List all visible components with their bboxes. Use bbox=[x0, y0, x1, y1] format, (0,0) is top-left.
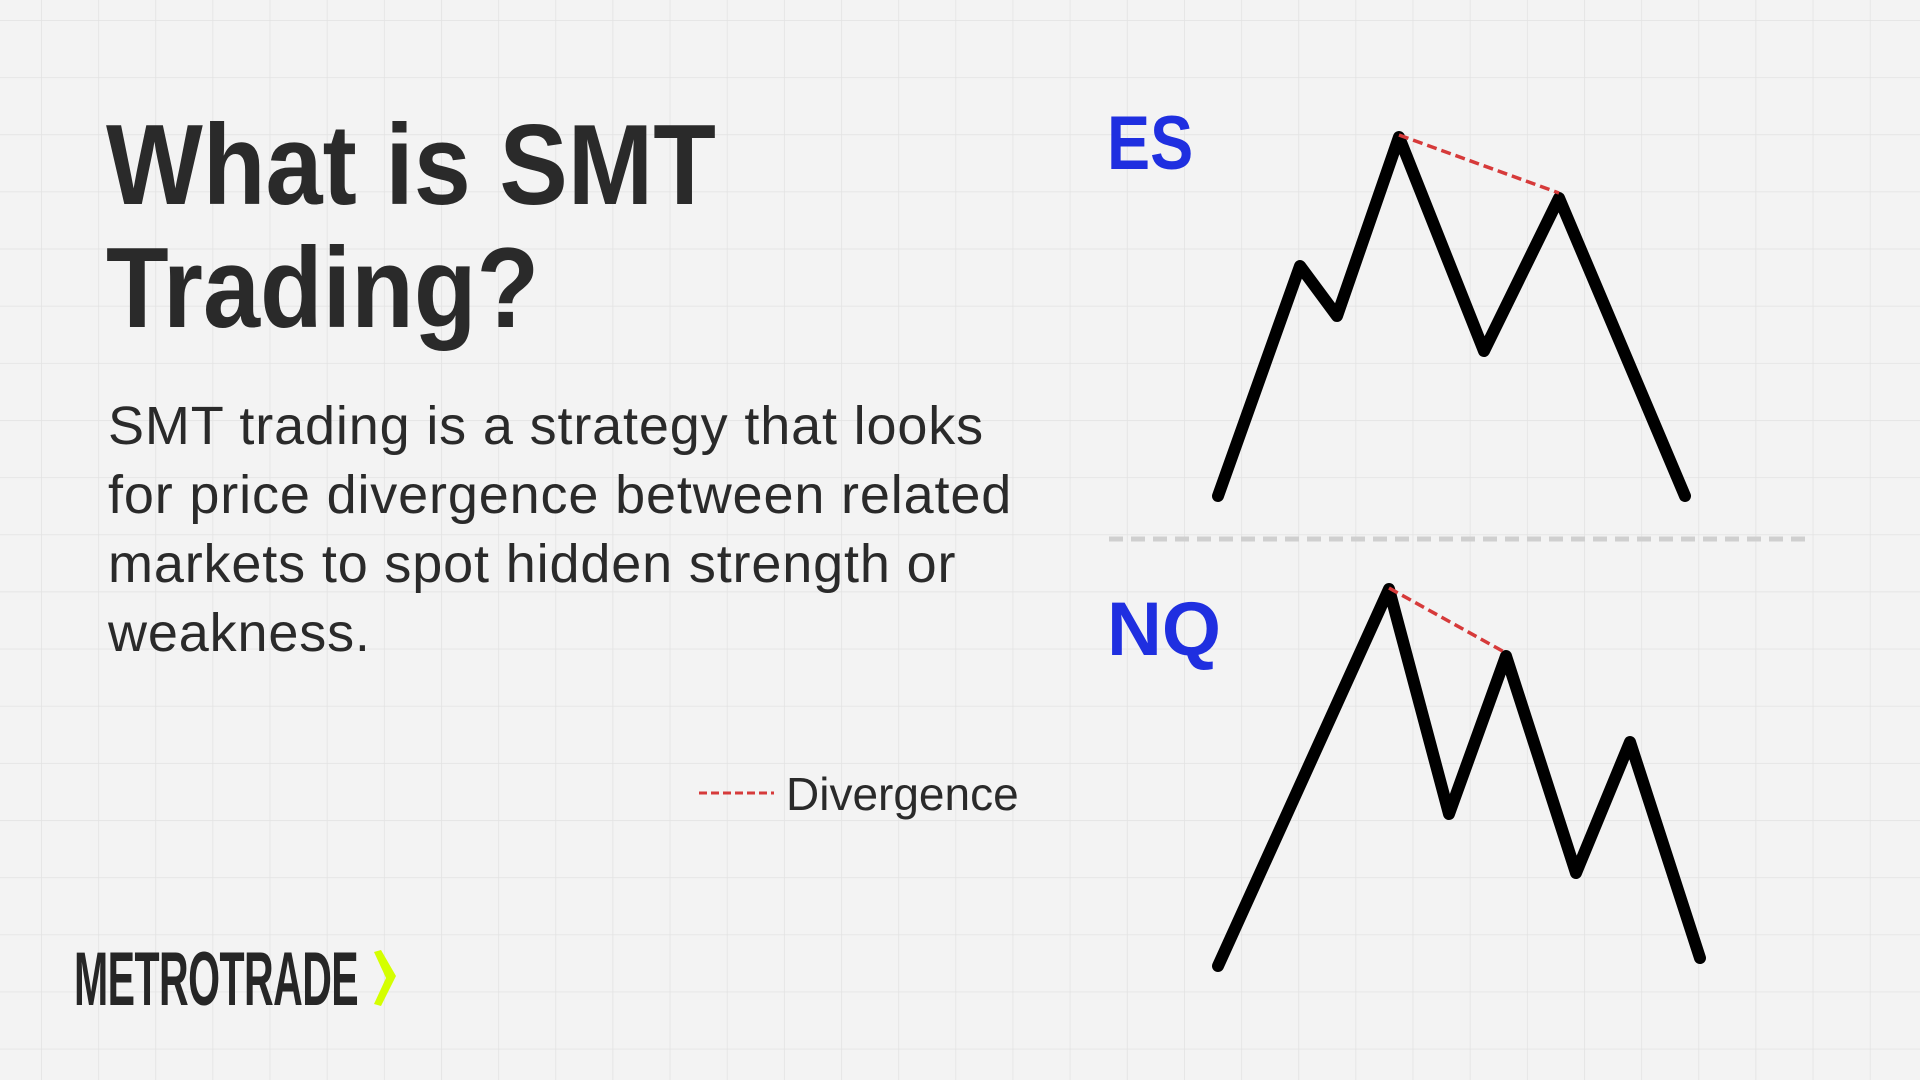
title: Trading? bbox=[106, 225, 539, 352]
NQ price line bbox=[1218, 588, 1700, 966]
logo: METROTRADE bbox=[74, 937, 358, 1022]
description text bbox=[108, 396, 1012, 663]
description text: SMT trading is a strategy that looks bbox=[108, 396, 984, 456]
title bbox=[106, 102, 716, 352]
ES price line bbox=[1218, 135, 1685, 496]
description text: weakness. bbox=[108, 603, 371, 663]
label: ES: ES bbox=[1107, 101, 1193, 186]
legend: divergence: Divergence bbox=[786, 768, 1019, 820]
icon: chevron bbox=[374, 950, 396, 1006]
label: NQ: NQ bbox=[1107, 587, 1221, 672]
title: What is SMT bbox=[106, 102, 716, 229]
description text: for price divergence between related bbox=[108, 465, 1012, 525]
description text: markets to spot hidden strength or bbox=[108, 534, 956, 594]
